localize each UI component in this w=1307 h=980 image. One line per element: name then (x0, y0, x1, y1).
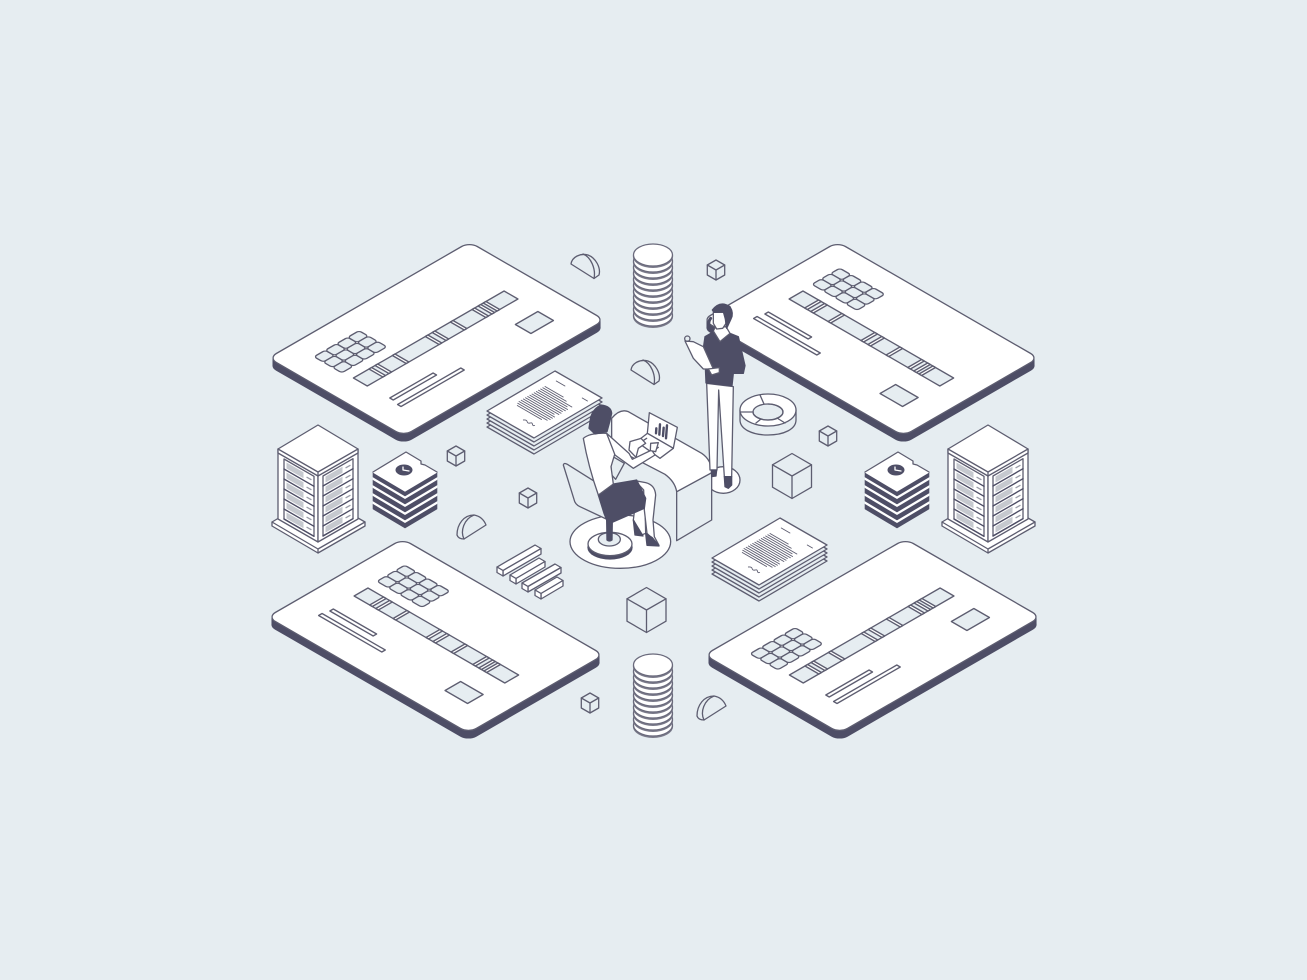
chair base (588, 520, 632, 559)
icon: row of bars (497, 545, 563, 599)
icon: dome center (631, 360, 659, 384)
icon: server tower right (942, 425, 1035, 553)
man (685, 304, 745, 488)
icon: coin stack top (634, 244, 672, 327)
panel: card bottom right (705, 539, 1041, 740)
icon: document stack lower (712, 518, 827, 601)
laptop (637, 413, 677, 458)
panel: card top right (703, 242, 1039, 444)
panel: card top left (269, 242, 605, 444)
platform under chair (570, 515, 671, 568)
icon: dome top left (571, 254, 599, 278)
icon: server tower left (272, 425, 365, 553)
icon: dome left (457, 515, 486, 539)
icon: document stack upper (487, 371, 602, 454)
chair back (563, 463, 608, 520)
icon: dome bottom (697, 696, 726, 720)
desk (612, 411, 712, 541)
icon: small cube left (447, 446, 465, 466)
icon: small cube right (819, 426, 837, 446)
icon: coin stack bottom (634, 654, 672, 737)
scene: office figures and desk (563, 304, 745, 568)
woman (583, 405, 659, 546)
icon: big cube right (772, 454, 812, 498)
icon: big cube bottom (627, 588, 666, 632)
icon: file stack left (373, 452, 437, 528)
icon: small cube center left (519, 488, 537, 508)
icon: ring chart (740, 394, 796, 435)
icon: file stack right (865, 452, 929, 528)
icon: small cube bottom (581, 693, 599, 713)
panel: card bottom left (268, 539, 604, 740)
icon: small cube top (707, 260, 725, 280)
platform under man (707, 467, 740, 493)
